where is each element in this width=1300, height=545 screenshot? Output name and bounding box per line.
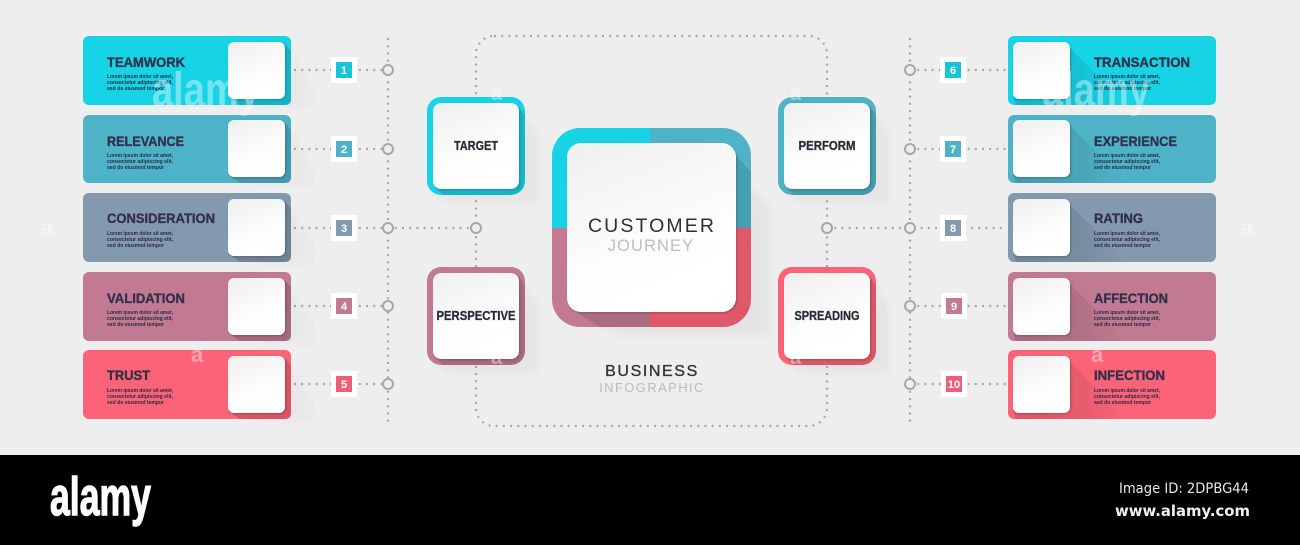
connector lines	[294, 36, 1006, 426]
business infographic caption: INFOGRAPHIC	[599, 380, 705, 395]
panel: relevance card: RELEVANCE	[107, 133, 184, 149]
perspective block: PERSPECTIVE	[436, 309, 516, 323]
watermarks	[41, 64, 1254, 369]
watermarks: a	[1241, 215, 1254, 240]
panel: validation card	[83, 272, 313, 344]
watermarks: a	[191, 342, 204, 367]
watermarks: a	[491, 83, 503, 105]
inner shadow	[576, 155, 751, 327]
panel: rating card	[1008, 193, 1216, 262]
image id: Image ID: 2DPBG44	[1119, 481, 1249, 497]
panel: validation card: Lorem ipsum dolor sit amet,	[107, 310, 174, 316]
panel: consideration card: sed do eiusmod tempor	[107, 243, 164, 249]
watermarks: a	[491, 347, 503, 369]
badge 6	[940, 57, 966, 83]
spreading block: SPREADING	[794, 309, 860, 323]
panel: experience card: Lorem ipsum dolor sit amet,	[1094, 153, 1161, 159]
panel: teamwork card: sed do eiusmod tempor	[107, 86, 164, 92]
panel: relevance card: Lorem ipsum dolor sit amet,	[107, 153, 174, 159]
panel: transaction card: Lorem ipsum dolor sit amet,	[1094, 74, 1161, 80]
panel: trust card: TRUST	[107, 367, 150, 383]
badge 5: 5	[341, 379, 347, 391]
panel: infection card: consectetur adipiscing elit,	[1094, 394, 1161, 400]
panel: experience card: EXPERIENCE	[1094, 133, 1177, 149]
heading: CUSTOMER	[588, 215, 716, 237]
badge 8: 8	[950, 223, 956, 235]
panel: validation card: VALIDATION	[107, 290, 185, 306]
panel: infection card: Lorem ipsum dolor sit amet,	[1094, 388, 1161, 394]
watermarks: a	[790, 83, 802, 105]
panel: teamwork card: TEAMWORK	[107, 54, 185, 70]
panel: validation card: consectetur adipiscing elit,	[107, 316, 174, 322]
badge 6: 6	[950, 65, 956, 77]
central customer journey block	[552, 128, 771, 335]
alamy logo: alamy	[50, 467, 151, 527]
panel: infection card: sed do eiusmod tempor	[1094, 400, 1151, 406]
bottom right quadrant	[650, 228, 751, 327]
top left quadrant	[552, 128, 650, 228]
website: www.alamy.com	[1115, 502, 1250, 520]
panel: trust card: Lorem ipsum dolor sit amet,	[107, 388, 174, 394]
panel: affection card: AFFECTION	[1094, 290, 1168, 306]
panel: teamwork card: consectetur adipiscing elit,	[107, 80, 174, 86]
panel: experience card: sed do eiusmod tempor	[1094, 165, 1151, 171]
panel: teamwork card	[83, 36, 313, 108]
panel: transaction card: sed do eiusmod tempor	[1094, 86, 1151, 92]
panel: infection card: INFECTION	[1094, 367, 1165, 383]
badge 7	[940, 136, 966, 162]
panel: affection card: Lorem ipsum dolor sit amet,	[1094, 310, 1161, 316]
badge 3	[331, 215, 357, 241]
panel: transaction card: consectetur adipiscing elit,	[1094, 80, 1161, 86]
perspective block	[427, 267, 539, 373]
bottom left quadrant	[552, 228, 650, 327]
panel: relevance card: sed do eiusmod tempor	[107, 165, 164, 171]
panel: rating card: sed do eiusmod tempor	[1094, 243, 1151, 249]
panel: transaction card	[1008, 36, 1216, 105]
watermarks: alamy	[1042, 64, 1150, 117]
subheading: JOURNEY	[608, 237, 694, 255]
badge 9	[941, 293, 967, 319]
badge 9: 9	[951, 301, 957, 313]
badge 4	[331, 293, 357, 319]
badge 7: 7	[950, 144, 956, 156]
number badges right	[940, 57, 967, 397]
target block: TARGET	[454, 139, 498, 153]
panel: rating card: consectetur adipiscing elit,	[1094, 237, 1161, 243]
panel: trust card	[83, 350, 313, 422]
badge 1: 1	[341, 65, 347, 77]
spreading block	[778, 267, 890, 373]
panel: experience card	[1008, 115, 1216, 183]
watermarks: a	[41, 215, 54, 240]
panel: rating card: RATING	[1094, 210, 1143, 226]
panel: infection card	[1008, 350, 1216, 419]
panel: consideration card: Lorem ipsum dolor sit amet,	[107, 231, 174, 237]
panel: affection card	[1008, 272, 1216, 341]
badge 2: 2	[341, 144, 347, 156]
perform block	[778, 97, 890, 203]
panel: validation card: sed do eiusmod tempor	[107, 322, 164, 328]
panel: affection card: consectetur adipiscing elit,	[1094, 316, 1161, 322]
panel: consideration card: consectetur adipiscing elit,	[107, 237, 174, 243]
number badges left	[331, 57, 357, 397]
badge 4: 4	[341, 301, 348, 313]
panel: consideration card: CONSIDERATION	[107, 210, 215, 226]
top right quadrant	[650, 128, 751, 228]
panel: trust card: consectetur adipiscing elit,	[107, 394, 174, 400]
business infographic caption: BUSINESS	[605, 363, 699, 380]
panel: relevance card	[83, 115, 313, 187]
connector nodes	[383, 65, 915, 389]
watermarks: a	[790, 347, 802, 369]
watermarks: alamy	[152, 64, 260, 117]
panel: relevance card: consectetur adipiscing elit,	[107, 159, 174, 165]
badge 5	[331, 371, 357, 397]
panel: experience card: consectetur adipiscing elit,	[1094, 159, 1161, 165]
badge 3: 3	[341, 223, 347, 235]
badge 8	[940, 215, 966, 241]
panel: consideration card	[83, 193, 313, 265]
watermarks: a	[1091, 342, 1104, 367]
business infographic caption	[599, 363, 705, 395]
panel: teamwork card: Lorem ipsum dolor sit amet,	[107, 74, 174, 80]
target block	[427, 97, 539, 203]
footer bar	[0, 455, 1300, 545]
perform block: PERFORM	[798, 139, 856, 153]
panel: trust card: sed do eiusmod tempor	[107, 400, 164, 406]
badge 10: 10	[948, 379, 960, 391]
badge 2	[331, 136, 357, 162]
panel: affection card: sed do eiusmod tempor	[1094, 322, 1151, 328]
inner white panel	[567, 143, 736, 312]
badge 10	[941, 371, 967, 397]
panel: rating card: Lorem ipsum dolor sit amet,	[1094, 231, 1161, 237]
badge 1	[331, 57, 357, 83]
panel: transaction card: TRANSACTION	[1094, 54, 1190, 70]
